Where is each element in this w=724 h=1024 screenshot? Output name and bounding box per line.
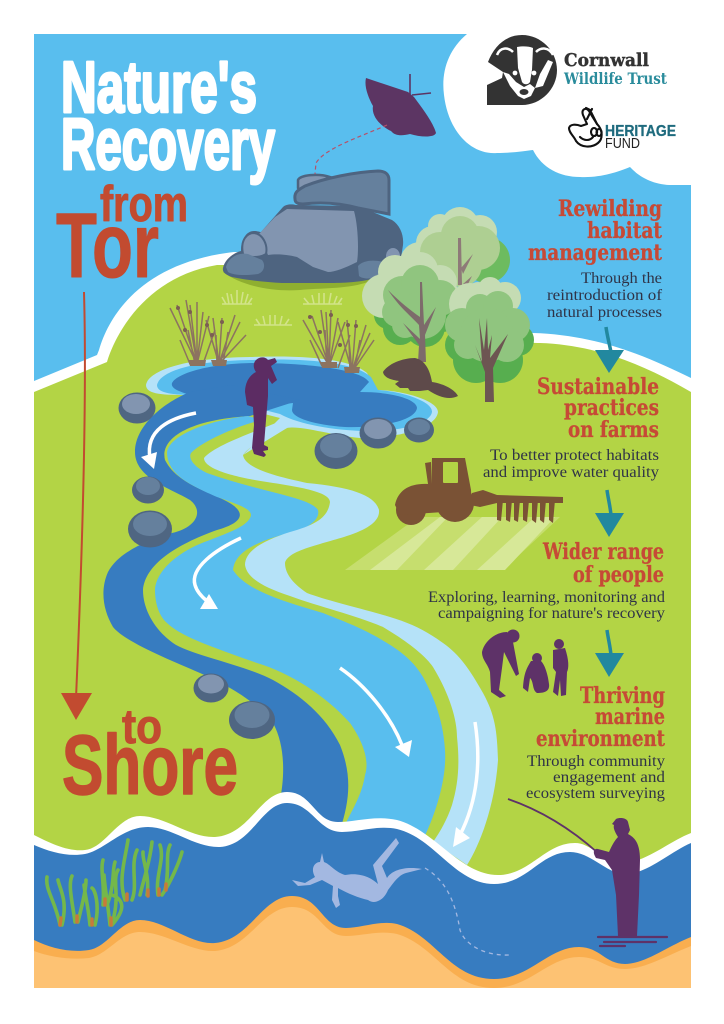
icon: diver: [292, 838, 422, 908]
pond: [146, 356, 438, 455]
icon: crossed fingers hand: [569, 108, 602, 147]
logo text: Heritage Fund: FUND: [605, 135, 640, 152]
text block: marine: engagement and: [553, 769, 665, 786]
icon: beaver: [383, 358, 458, 398]
text block: farms: on farms: [568, 417, 659, 443]
text block: farms: practices: [564, 395, 659, 421]
text block: marine: Thriving: [580, 683, 665, 709]
sand: [34, 907, 691, 988]
text block: rewilding: Rewilding: [558, 196, 662, 222]
text block: people: [428, 539, 665, 622]
logo text: Cornwall Wildlife Trust: Cornwall: [564, 50, 649, 71]
text block: rewilding: reintroduction of: [547, 287, 663, 304]
text block: rewilding: [528, 196, 663, 321]
green land: [34, 265, 691, 900]
title: Recovery: [61, 105, 275, 185]
text block: rewilding: management: [528, 240, 663, 266]
text block: rewilding: habitat: [587, 218, 663, 244]
text block: farms: [483, 374, 659, 481]
text block: marine: marine: [595, 704, 665, 730]
text block: farms: To better protect habitats: [490, 447, 659, 464]
icon: grass tufts: [222, 290, 342, 325]
arrow: teal two: [595, 490, 624, 537]
text block: marine: Through community: [527, 753, 665, 770]
title: Nature's: [61, 48, 257, 128]
rocks on riverbank: [118, 392, 434, 739]
heading: to Shore: [62, 701, 238, 812]
text block: people: Wider range: [542, 539, 664, 565]
icon: birdwatcher: [245, 357, 277, 457]
tree right: [445, 277, 534, 402]
text block: rewilding: natural processes: [547, 304, 662, 321]
text block: marine: ecosystem surveying: [526, 785, 665, 802]
sea: [34, 803, 691, 988]
text block: rewilding: Through the: [581, 270, 662, 287]
river flow arrows: [141, 413, 478, 847]
icon: seagrass: [47, 840, 182, 925]
icon: reeds: [170, 300, 374, 373]
logo text: Heritage Fund: HERITAGE: [605, 123, 676, 140]
text block: marine: [526, 683, 666, 802]
icon: fisher: [508, 799, 667, 946]
icon: moth: [365, 74, 436, 136]
text block: people: of people: [573, 562, 664, 588]
title: [61, 48, 275, 185]
heading: from Tor: Tor: [56, 195, 159, 297]
heading: from Tor: from: [100, 176, 188, 232]
river: pale blue channel: [204, 420, 498, 865]
logo text: Heritage Fund: [605, 123, 676, 152]
heading: to Shore: Shore: [62, 718, 238, 812]
foreshore white band: [34, 792, 691, 988]
river: mid blue channel: [155, 416, 445, 840]
text block: farms: Sustainable: [537, 374, 659, 400]
text block: marine: environment: [536, 726, 666, 752]
field stripes: [345, 517, 560, 570]
land white edge: [34, 252, 691, 900]
moth flight trail: [315, 125, 387, 174]
text block: people: Exploring, learning, monitoring and: [428, 589, 665, 606]
icon: family group: [482, 630, 568, 698]
arrow: tor to shore: [61, 292, 92, 720]
logo text: Cornwall Wildlife Trust: Wildlife Trust: [563, 69, 668, 88]
text block: people: campaigning for nature's recovery: [438, 605, 665, 622]
text block: farms: and improve water quality: [483, 464, 659, 481]
heading: to Shore: to: [122, 701, 162, 754]
arrow: teal three: [595, 630, 624, 677]
cloud with logos: [443, 34, 691, 185]
tree back: [400, 207, 510, 287]
tor rocks: [223, 171, 403, 290]
logo text: Cornwall Wildlife Trust: [563, 50, 668, 88]
diver bubble trail: [425, 868, 509, 955]
river: dark blue channel: [103, 385, 348, 830]
tree left: [362, 252, 459, 362]
arrow: teal one: [595, 327, 624, 373]
icon: tractor: [395, 458, 563, 525]
sand dark edge: [34, 896, 691, 988]
badger logo: [487, 35, 557, 105]
